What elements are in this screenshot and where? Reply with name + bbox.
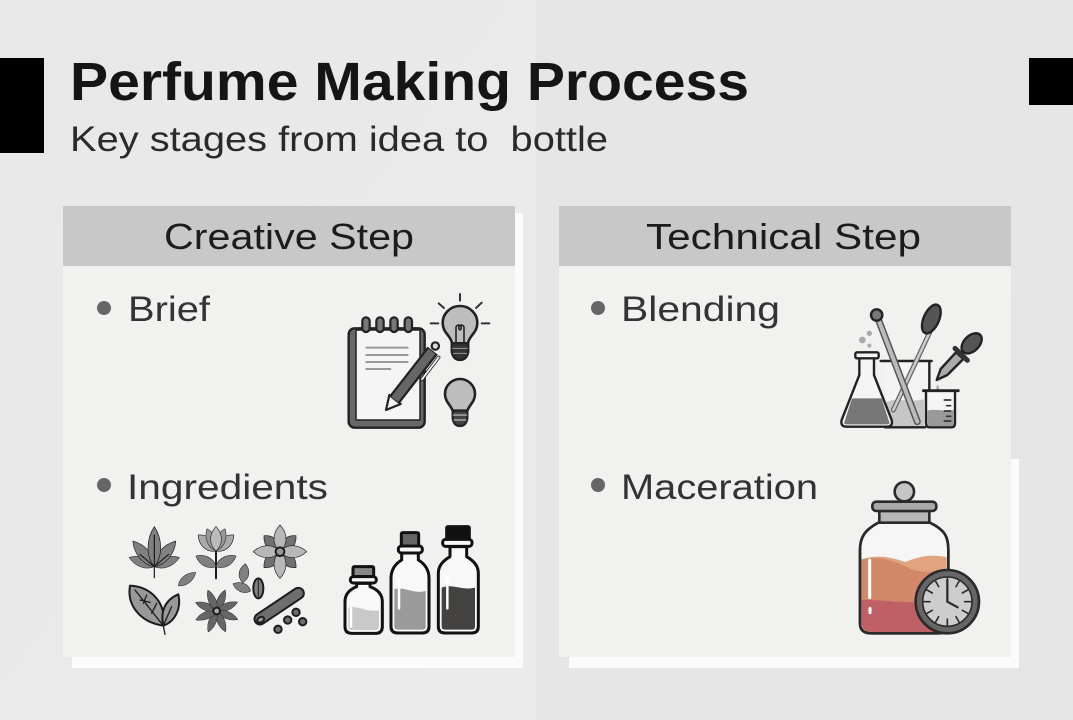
clock [916,570,979,633]
cinnamon stick and seeds [256,593,306,633]
heading band: creative step [63,206,515,266]
heading: creative step: Creative Step [164,216,414,257]
small bottle [345,567,382,633]
small leaves and bean [176,563,263,598]
large leaf pair [129,586,179,634]
title: Perfume Making Process [70,52,749,112]
star anise [194,589,239,633]
bullet: brief [97,290,210,329]
bullet: maceration: Maceration [621,468,818,507]
panel: technical step [559,206,1019,668]
jar [860,523,948,633]
stirring rod and pipette [871,302,945,422]
lid [872,482,936,523]
subtitle: Key stages from idea to bottle [70,120,608,159]
bullet: blending: Blending [621,290,780,329]
panel: creative step [63,206,523,668]
panel body [63,206,515,657]
panel white offset [72,213,523,668]
medium bottle [391,533,429,633]
bullet: brief: Brief [128,290,210,329]
small beaker [923,391,958,427]
icon: three perfume bottles [345,527,478,633]
panel body [559,206,1011,657]
panel white offset [569,459,1019,668]
maple leaf [128,527,181,578]
icon: maceration jar with clock [860,482,979,633]
beaker [881,361,932,427]
icon: botanical ingredients [128,525,307,634]
dropper [936,329,986,396]
large bottle [438,527,478,633]
tulip [194,526,238,578]
flower [253,525,307,578]
right black accent block [1029,58,1073,105]
bullet: ingredients: Ingredients [127,468,328,507]
icon: lab glassware and droppers [841,302,986,427]
heading: technical step: Technical Step [646,216,921,257]
icon: notebook, pen and light bulbs [349,294,489,428]
heading band: technical step [559,206,1011,266]
conical flask [841,331,892,427]
left black accent block [0,58,44,153]
